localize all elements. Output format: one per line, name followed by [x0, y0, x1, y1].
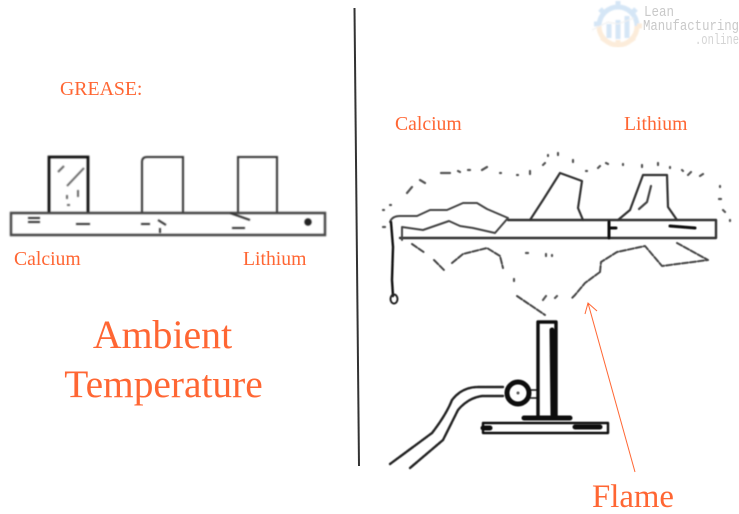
bar dark marks: [609, 222, 695, 238]
logo text: [643, 4, 739, 49]
gear upper: [599, 7, 637, 26]
softened lithium grease: [618, 175, 677, 220]
middle sample block: [142, 157, 183, 212]
logo line one: Lean: [644, 4, 674, 21]
valve connector: [531, 390, 538, 398]
calcium drip: [391, 222, 393, 296]
drip drop: [390, 294, 398, 304]
panel: flame test: [383, 113, 730, 514]
heading: grease: GREASE:: [60, 78, 142, 100]
heated bar: [400, 220, 716, 238]
label: calcium: Calcium: [14, 248, 81, 270]
vertical divider: [354, 8, 359, 466]
calcium sample shading: [58, 166, 84, 205]
label: lithium top: Lithium: [624, 113, 687, 135]
logo: lean manufacturing online: [592, 1, 739, 49]
panel: ambient temperature: [11, 78, 325, 406]
gas valve: [507, 382, 529, 404]
burner tube shadow: [552, 330, 553, 415]
burner base: [483, 423, 608, 433]
logo gear icon: [592, 1, 642, 45]
gear teeth lower: [602, 26, 642, 45]
lithium sample block: [238, 157, 277, 212]
gear lower: [599, 26, 637, 45]
sketch: bar over flame: [383, 153, 730, 315]
spray dots: [383, 153, 730, 300]
valve centre: [516, 392, 520, 394]
softened middle grease: [530, 173, 583, 220]
label: flame: Flame: [592, 479, 674, 514]
burner tube: [538, 322, 556, 417]
arrow to flame: [585, 303, 635, 472]
gear teeth upper: [594, 1, 636, 24]
flame outline: [412, 243, 708, 315]
lithium inner mark: [639, 186, 651, 209]
chart line: [592, 18, 634, 30]
gas hose: [390, 387, 503, 468]
melted calcium grease: [390, 203, 508, 240]
bar end mark: [305, 219, 311, 225]
bar chart in gear: [609, 16, 627, 39]
label: lithium: Lithium: [243, 248, 306, 270]
title: temperature line: Temperature: [64, 362, 263, 406]
bar: [11, 213, 325, 235]
sketch: bunsen burner: [390, 322, 608, 468]
title: ambient temperature: Ambient: [93, 313, 232, 357]
burner base shading: [483, 418, 600, 428]
calcium sample block: [49, 157, 88, 212]
sketch: bar with three grease samples: [11, 157, 325, 235]
bar surface marks: [28, 213, 250, 233]
label: calcium top: Calcium: [395, 113, 462, 135]
